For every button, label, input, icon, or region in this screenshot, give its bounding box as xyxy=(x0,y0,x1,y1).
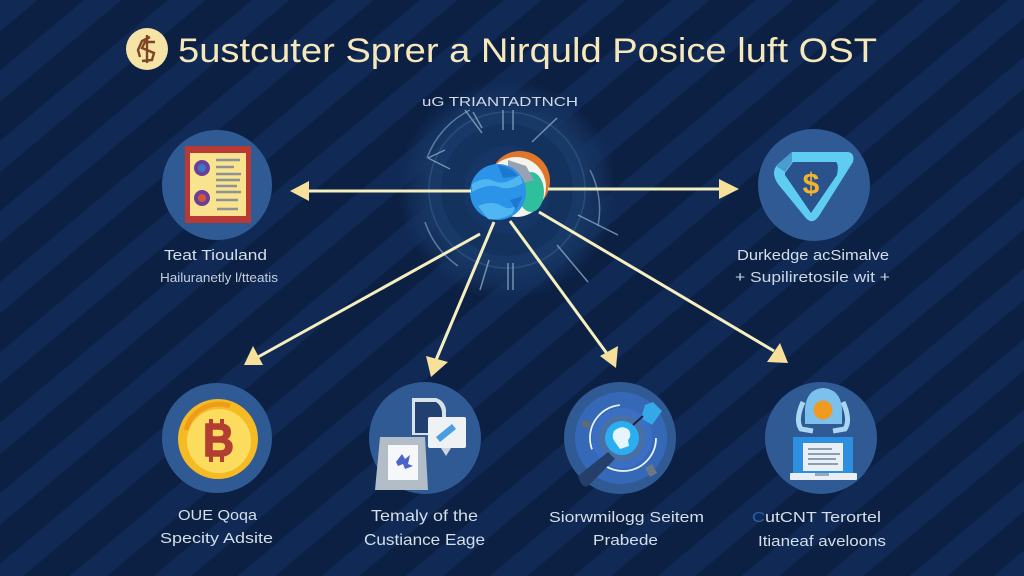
icon: bitcoin coin: B xyxy=(203,414,234,466)
globe back disc xyxy=(490,151,550,211)
label: Teat Tiouland xyxy=(164,247,267,264)
central hub graphic xyxy=(397,80,618,300)
label: OUE Qoqa xyxy=(178,507,258,524)
icon: document xyxy=(185,146,251,223)
panel: bottom 2 devices xyxy=(364,382,485,549)
title: 5ustcuter Sprer a Nirquld Posice luft OST xyxy=(178,32,877,70)
panel: bottom 4 laptop xyxy=(752,382,886,550)
icon: bitcoin coin xyxy=(178,399,258,479)
hub glow xyxy=(397,80,617,300)
icon: laptop and helmet xyxy=(790,388,857,480)
sublabel: Specity Adsite xyxy=(160,530,273,547)
panel: bottom 3 target xyxy=(549,382,704,549)
sublabel: Custiance Eage xyxy=(364,532,485,549)
sublabel: + Supiliretosile wit + xyxy=(735,269,890,286)
arrow: hub to bottom right 1 xyxy=(510,221,618,368)
globe xyxy=(470,164,526,220)
label: Temaly of the xyxy=(371,508,478,525)
title icon: coin xyxy=(126,28,168,70)
arrow: hub to bottom right 2 xyxy=(539,212,788,363)
panel: top right diamond xyxy=(735,129,890,286)
arrow: hub to top left xyxy=(290,181,471,201)
hub caption: uG TRIANTADTNCH xyxy=(422,94,578,109)
icon: shield with dollar xyxy=(774,152,853,221)
icon: screens xyxy=(375,398,466,490)
panel: bottom 1 bitcoin xyxy=(160,383,273,547)
icon: radar target xyxy=(575,392,667,487)
sublabel: Itianeaf aveloons xyxy=(758,533,886,550)
arrow: hub to top right xyxy=(548,179,739,199)
sublabel: Prabede xyxy=(593,532,658,549)
panel: top left document xyxy=(160,130,279,285)
sublabel: Hailuranetly l/tteatis xyxy=(160,270,279,285)
icon: shield with dollar: $ xyxy=(803,168,820,201)
label: Siorwmilogg Seitem xyxy=(549,509,704,526)
label: CutCNT Terortel xyxy=(752,509,881,526)
label: Durkedge acSimalve xyxy=(737,247,889,264)
arrow: hub to bottom left 2 xyxy=(426,222,494,377)
arrow: hub to bottom left 1 xyxy=(244,234,480,365)
